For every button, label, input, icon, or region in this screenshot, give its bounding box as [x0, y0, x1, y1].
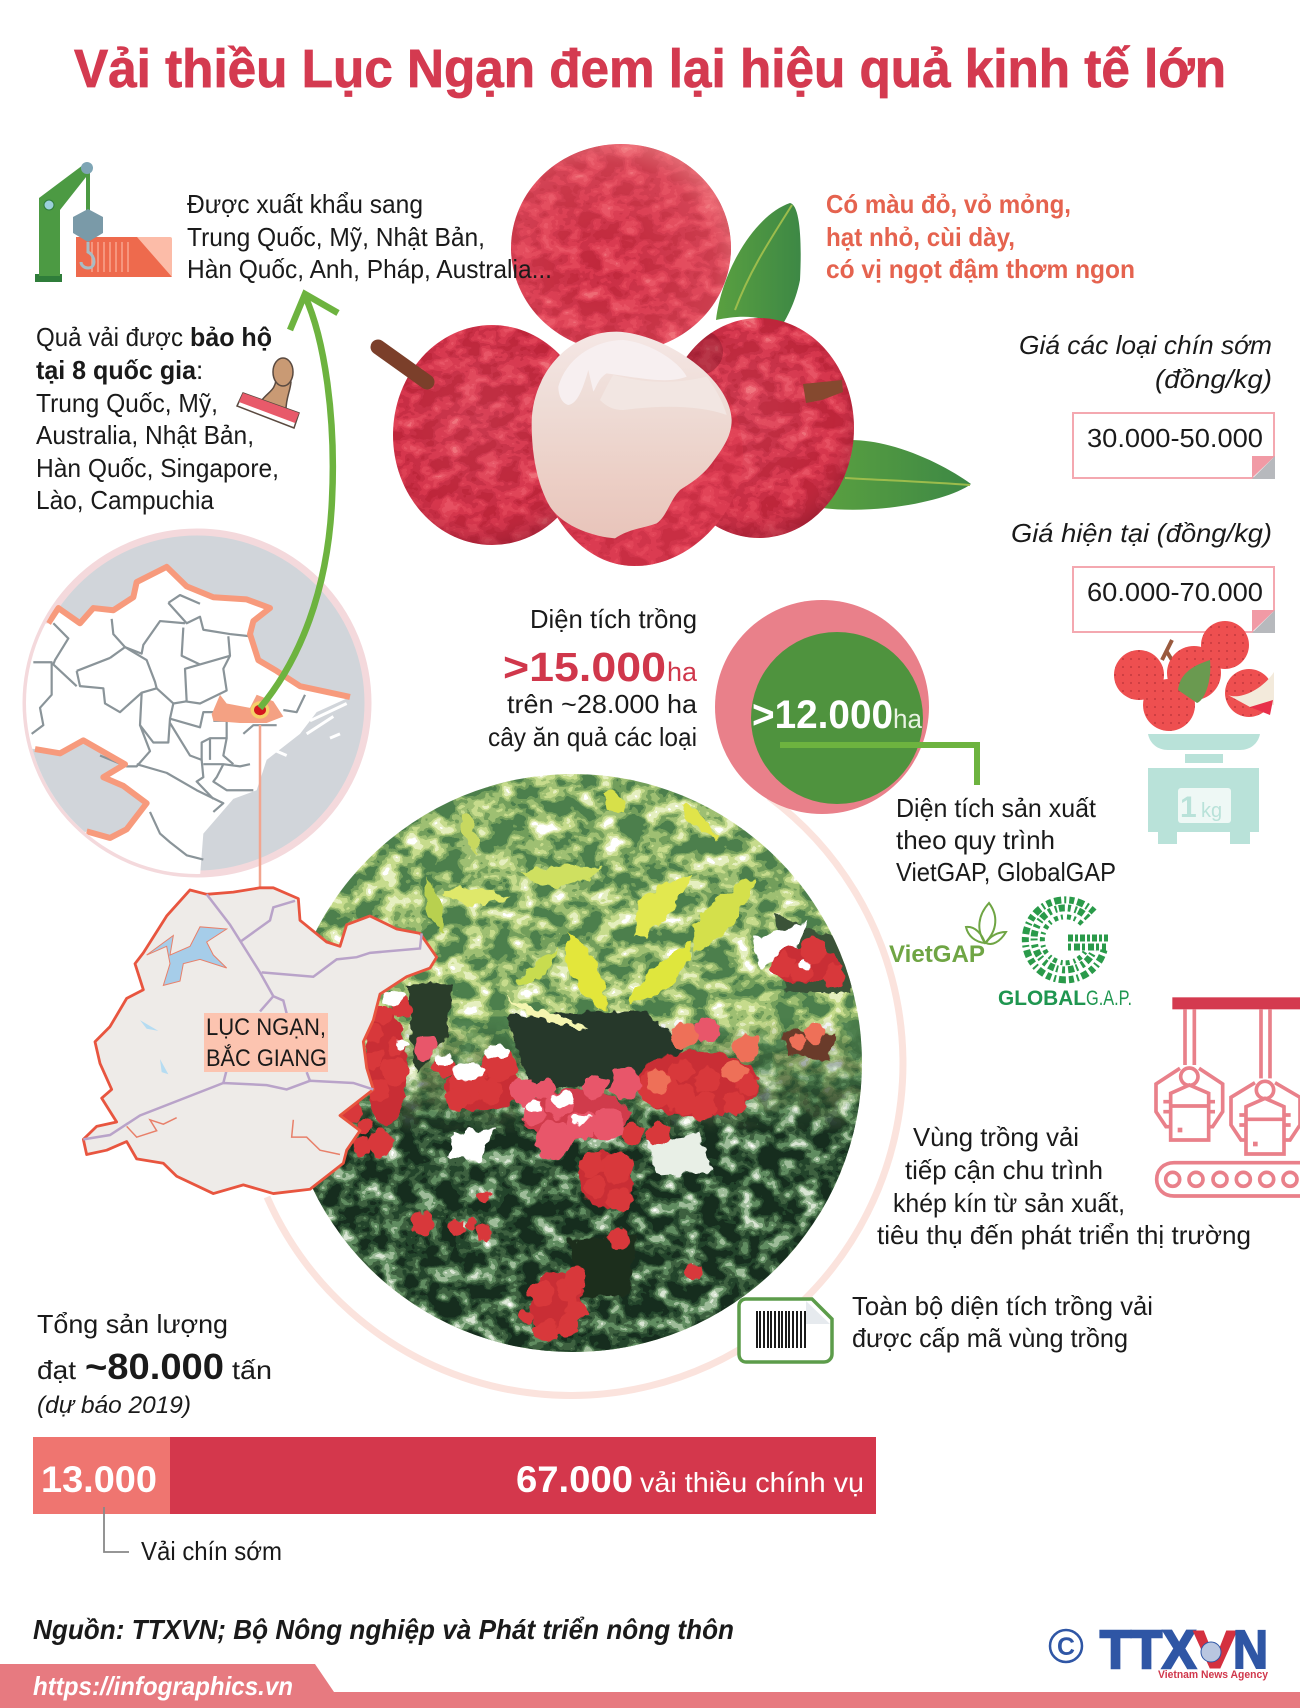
fruit: left	[393, 325, 560, 545]
bar chart: output split	[33, 1437, 876, 1514]
price box: early	[1073, 413, 1275, 479]
panel: regional map circle	[0, 532, 368, 877]
text: protected in 8 countries: tại 8 quốc gia	[36, 355, 197, 385]
text: export markets: Được xuất khẩu sang	[187, 189, 423, 219]
icon: factory conveyor	[1156, 997, 1300, 1196]
bar chart: output split: vải thiều chính vụ	[640, 1467, 864, 1498]
text: early price label	[1019, 330, 1272, 394]
stat circle: VietGAP area: ha	[893, 704, 923, 734]
rivers	[127, 1118, 340, 1155]
text: protected in 8 countries: Quả vải được	[36, 322, 183, 352]
leaf: right	[822, 440, 971, 510]
stem: left	[378, 347, 427, 382]
icon: scale 1kg	[1148, 734, 1260, 844]
text: VietGAP GlobalGAP area	[896, 793, 1116, 887]
fruit highlights	[381, 961, 812, 1124]
bar chart: output split: 13.000	[41, 1459, 157, 1500]
stat circle: VietGAP area: >12.000	[752, 693, 893, 737]
dark canopy hollows	[507, 1011, 687, 1088]
text: growing area code: Toàn bộ diện tích trồng vải	[852, 1291, 1153, 1321]
source: Nguồn: TTXVN; Bộ Nông nghiệp và Phát triển nông thôn	[33, 1614, 734, 1645]
lake	[147, 927, 227, 985]
text: planted area	[488, 604, 698, 752]
text: protected in 8 countries: :	[196, 355, 203, 385]
text: protected in 8 countries: Lào, Campuchia	[36, 485, 215, 515]
fruit: top	[511, 144, 731, 344]
leader line: VietGAP area	[780, 745, 977, 785]
panel: Luc Ngan local map	[83, 888, 437, 1194]
text: export markets last line: Hàn Quốc, Anh, Pháp, Australia...	[187, 254, 552, 284]
logo: TTXVN: C	[1057, 1633, 1075, 1661]
text: fruit characteristics: Có màu đỏ, vỏ mỏng,	[826, 189, 1071, 219]
sea islands	[267, 703, 347, 756]
text: planted area: trên ~28.000 ha	[507, 689, 698, 719]
text: total output: (dự báo 2019)	[37, 1392, 191, 1419]
label: Luc Ngan, Bac Giang	[204, 1013, 328, 1072]
text: fruit characteristics: hạt nhỏ, cùi dày,	[826, 222, 1015, 252]
logo: TTXVN: V	[1193, 1620, 1237, 1680]
text: total output: ~80.000	[85, 1346, 224, 1387]
text: export markets: Trung Quốc, Mỹ, Nhật Bản,	[187, 222, 485, 252]
text: protected in 8 countries: Trung Quốc, Mỹ,	[36, 388, 218, 418]
leader: early lychee	[104, 1507, 129, 1552]
lychee fruit illustration	[378, 140, 971, 570]
text: early price label: Giá các loại chín sớm	[1019, 330, 1272, 360]
label: Luc Ngan, Bac Giang: BẮC GIANG	[206, 1044, 327, 1072]
peeled fruit skin	[531, 397, 743, 566]
fruit: right	[686, 318, 854, 538]
price box: current	[1073, 567, 1275, 633]
logo: VietGAP: VietGAP	[889, 941, 985, 968]
text: total output: tấn	[232, 1355, 272, 1385]
icon: scale 1kg: 1	[1180, 791, 1197, 824]
text: protected in 8 countries: Hàn Quốc, Singapore,	[36, 453, 279, 483]
text: protected in 8 countries: bảo hộ	[190, 322, 272, 352]
arc ring around orchard photo	[267, 797, 903, 1395]
label: Luc Ngan, Bac Giang: LỤC NGẠN,	[206, 1014, 326, 1041]
text: growing area code	[852, 1291, 1153, 1353]
peeled flesh	[532, 332, 732, 538]
text: fruit characteristics	[826, 189, 1135, 284]
price box: current: 60.000-70.000	[1087, 577, 1263, 607]
text: closed production cycle	[877, 1122, 1251, 1250]
logo: TTXVN: Vietnam News Agency	[1158, 1669, 1269, 1681]
text: current price label: Giá hiện tại (đồng/kg)	[1011, 518, 1272, 548]
text: export markets	[187, 189, 485, 252]
text: fruit characteristics: có vị ngọt đậm thơm ngon	[826, 254, 1135, 284]
text: planted area: cây ăn quả các loại	[488, 722, 697, 752]
logo: GlobalG.A.P.: G.A.P.	[1086, 987, 1132, 1010]
text: total output	[37, 1309, 272, 1419]
text: VietGAP GlobalGAP area: Diện tích sản xuất	[896, 793, 1097, 823]
red fruit clusters	[340, 936, 845, 1342]
text: planted area: >15.000	[503, 644, 666, 690]
Bac Giang province highlight	[212, 695, 283, 723]
text: closed production cycle: tiếp cận chu trình	[905, 1155, 1103, 1185]
text: VietGAP GlobalGAP area: VietGAP, GlobalGAP	[896, 857, 1116, 887]
arrow: from Luc Ngan to export	[260, 294, 338, 708]
text: closed production cycle: Vùng trồng vải	[913, 1122, 1079, 1152]
logo: VietGAP	[889, 903, 1006, 968]
text: early lychee: Vải chín sớm	[141, 1536, 282, 1566]
stem: right	[803, 380, 843, 403]
text: closed production cycle: tiêu thụ đến phát triển thị trường	[877, 1220, 1251, 1250]
icon: barcode label	[739, 1299, 832, 1362]
logo: TTXVN	[1050, 1620, 1269, 1681]
text: protected in 8 countries: Australia, Nhật Bản,	[36, 420, 254, 450]
price box: early: 30.000-50.000	[1087, 423, 1263, 453]
logo: GlobalG.A.P.: GLOBAL	[998, 987, 1086, 1010]
fruit cluster backing	[365, 946, 840, 1333]
national border	[35, 567, 350, 838]
icon: stamp	[237, 358, 299, 428]
Laos area	[32, 744, 142, 835]
text: VietGAP GlobalGAP area: theo quy trình	[896, 825, 1055, 855]
connector: map to local map	[259, 725, 261, 890]
logo: GlobalG.A.P.	[998, 900, 1132, 1010]
text: protected in 8 countries	[36, 322, 279, 515]
province boundaries	[32, 595, 305, 860]
logo: TTXVN: TTX	[1100, 1620, 1196, 1680]
yellow-green leaves	[507, 996, 591, 1030]
title: Vải thiều Lục Ngạn đem lại hiệu quả kinh tế lớn	[74, 39, 1226, 99]
logo: TTXVN: N	[1233, 1620, 1268, 1680]
text: growing area code: được cấp mã vùng trồng	[852, 1323, 1128, 1353]
footer band with URL	[0, 1664, 1300, 1708]
orchard photo circle	[284, 774, 864, 1354]
icon: port crane with container	[35, 162, 172, 282]
bar chart: output split: 67.000	[516, 1459, 633, 1500]
leaf: top	[716, 203, 801, 326]
icon: scale 1kg: kg	[1201, 800, 1222, 822]
text: planted area: ha	[667, 657, 698, 687]
text: planted area: Diện tích trồng	[530, 604, 697, 634]
text: closed production cycle: khép kín từ sản xuất,	[893, 1188, 1125, 1218]
stat circle: VietGAP area	[715, 600, 929, 814]
footer band with URL: https://infographics.vn	[33, 1671, 293, 1701]
text: total output: đạt	[37, 1355, 77, 1385]
map outline	[83, 888, 437, 1194]
land	[26, 570, 346, 874]
icon: small lychees	[1114, 621, 1274, 731]
roads	[83, 894, 422, 1139]
text: total output: Tổng sản lượng	[37, 1309, 228, 1339]
text: early price label: (đồng/kg)	[1155, 364, 1272, 394]
